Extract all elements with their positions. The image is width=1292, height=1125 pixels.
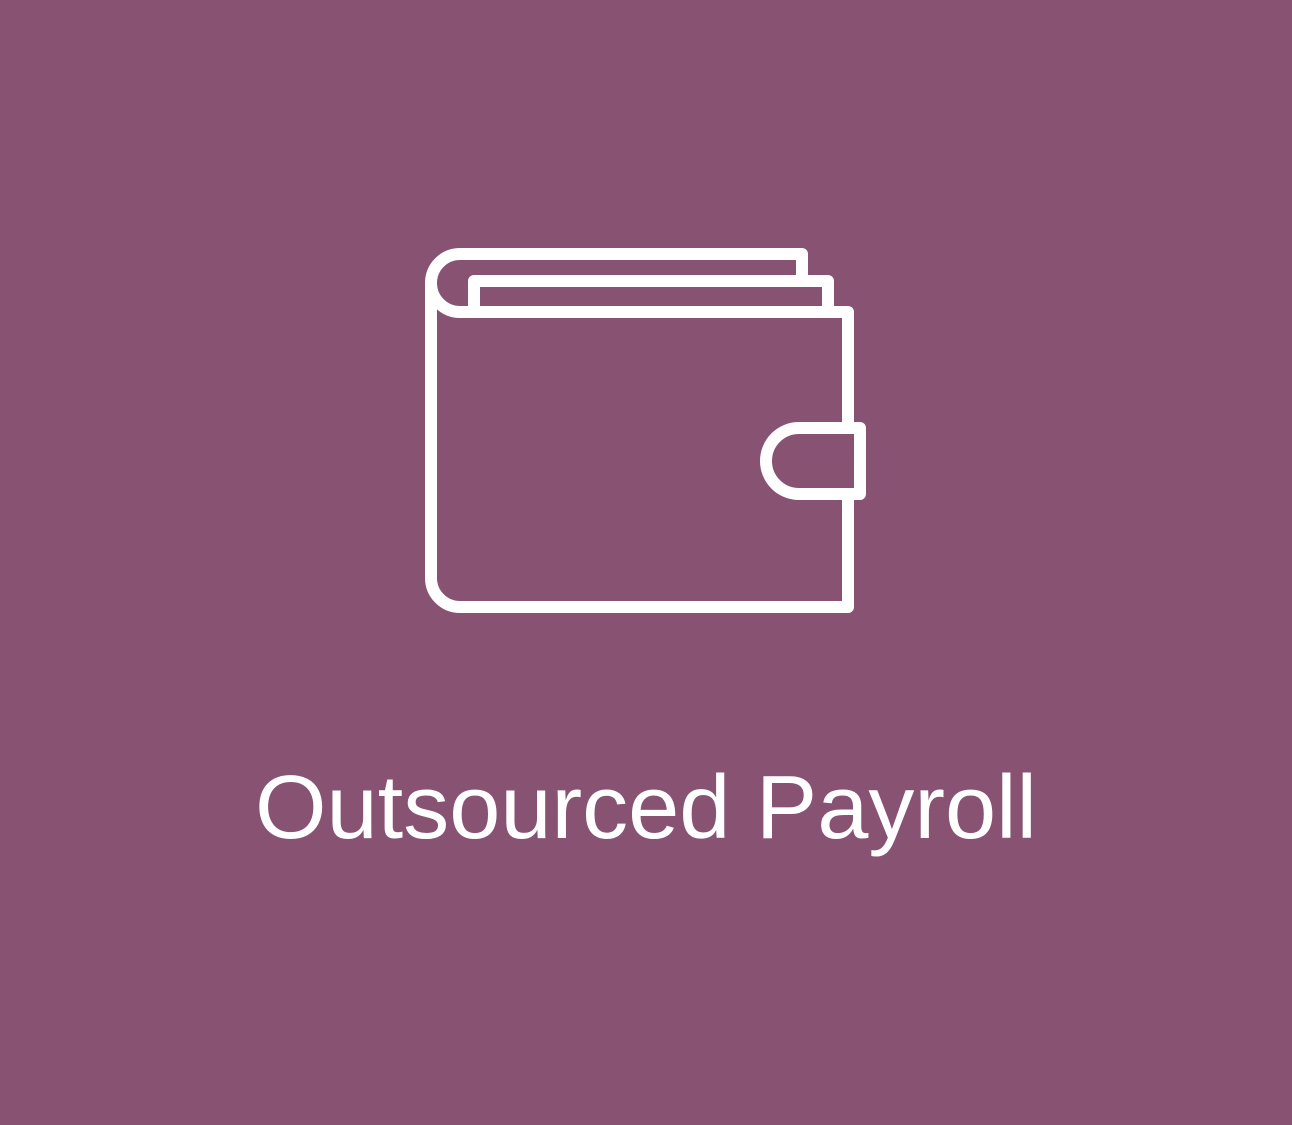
icon: wallet xyxy=(431,254,860,607)
title: Outsourced Payroll xyxy=(255,758,1037,858)
